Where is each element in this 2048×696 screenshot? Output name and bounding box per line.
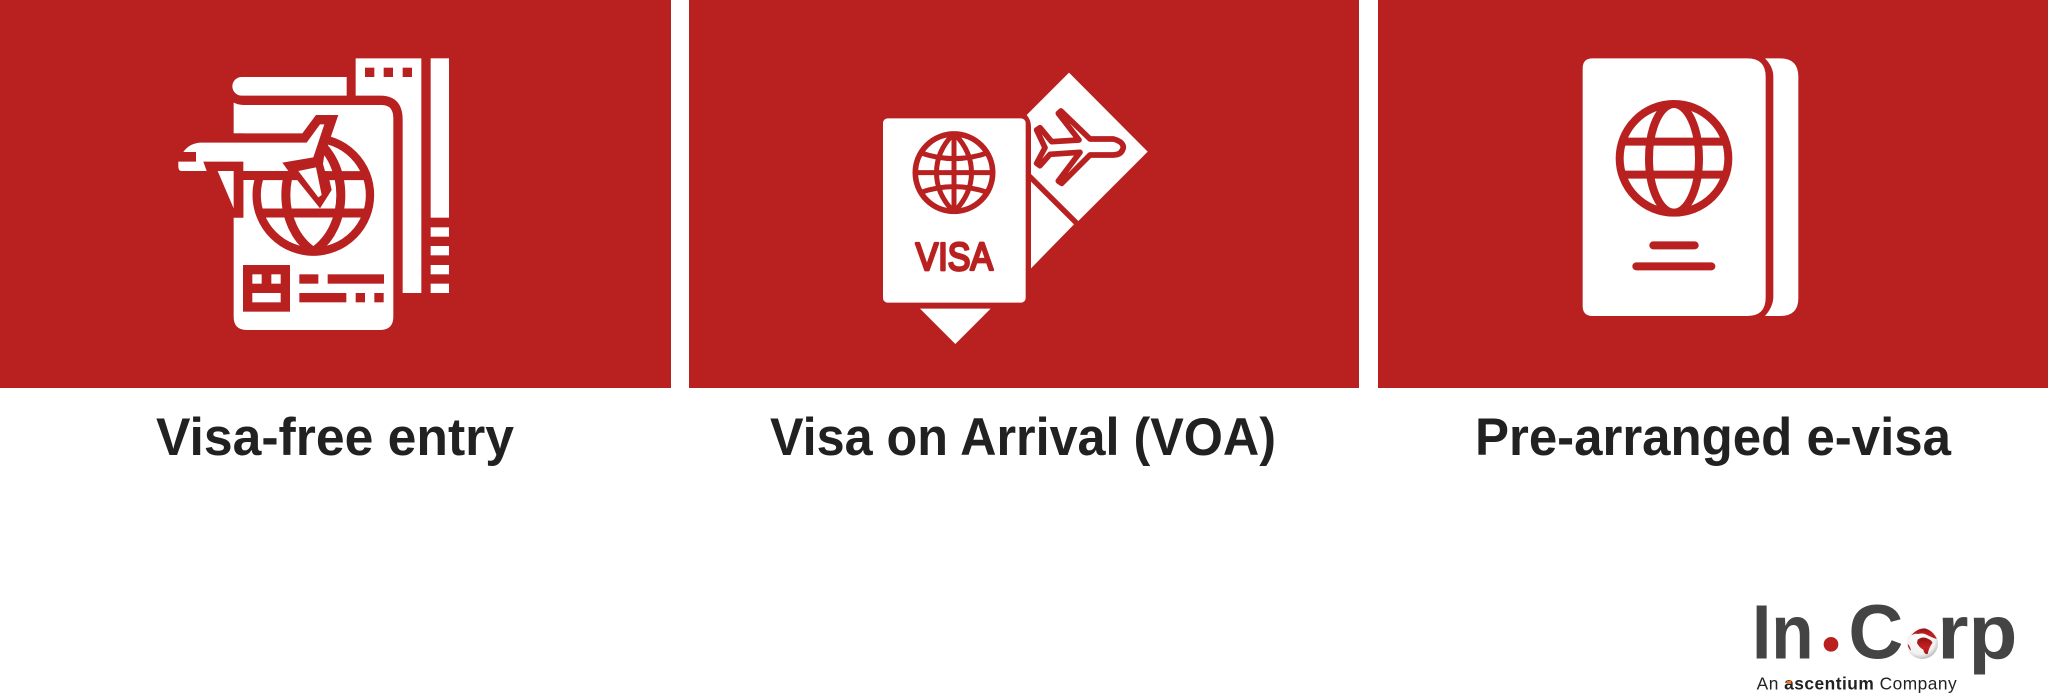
tagline: An ascentium Company xyxy=(1757,673,1957,693)
logo: InCorp: C xyxy=(1848,589,1903,675)
panel: visa on arrival xyxy=(689,0,1359,388)
icon: passport xyxy=(1583,58,1798,316)
logo: InCorp: rp xyxy=(1937,589,2017,675)
logo dot xyxy=(1824,637,1838,652)
heading: pre-arranged e-visa: Pre-arranged e-visa xyxy=(1475,408,1951,467)
heading: visa-free entry: Visa-free entry xyxy=(156,408,515,467)
heading: visa on arrival: Visa on Arrival (VOA) xyxy=(770,408,1276,467)
logo accent xyxy=(1787,681,1791,684)
icon: visa document with ticket xyxy=(883,73,1148,344)
logo globe xyxy=(1907,628,1938,659)
icon: passport with plane and globe xyxy=(178,58,449,330)
logo: InCorp xyxy=(1752,589,2017,693)
label: visa: VISA xyxy=(916,235,994,279)
panel: pre-arranged e-visa xyxy=(1378,0,2048,388)
panel: visa-free entry xyxy=(0,0,671,388)
logo: InCorp: In xyxy=(1752,589,1814,675)
